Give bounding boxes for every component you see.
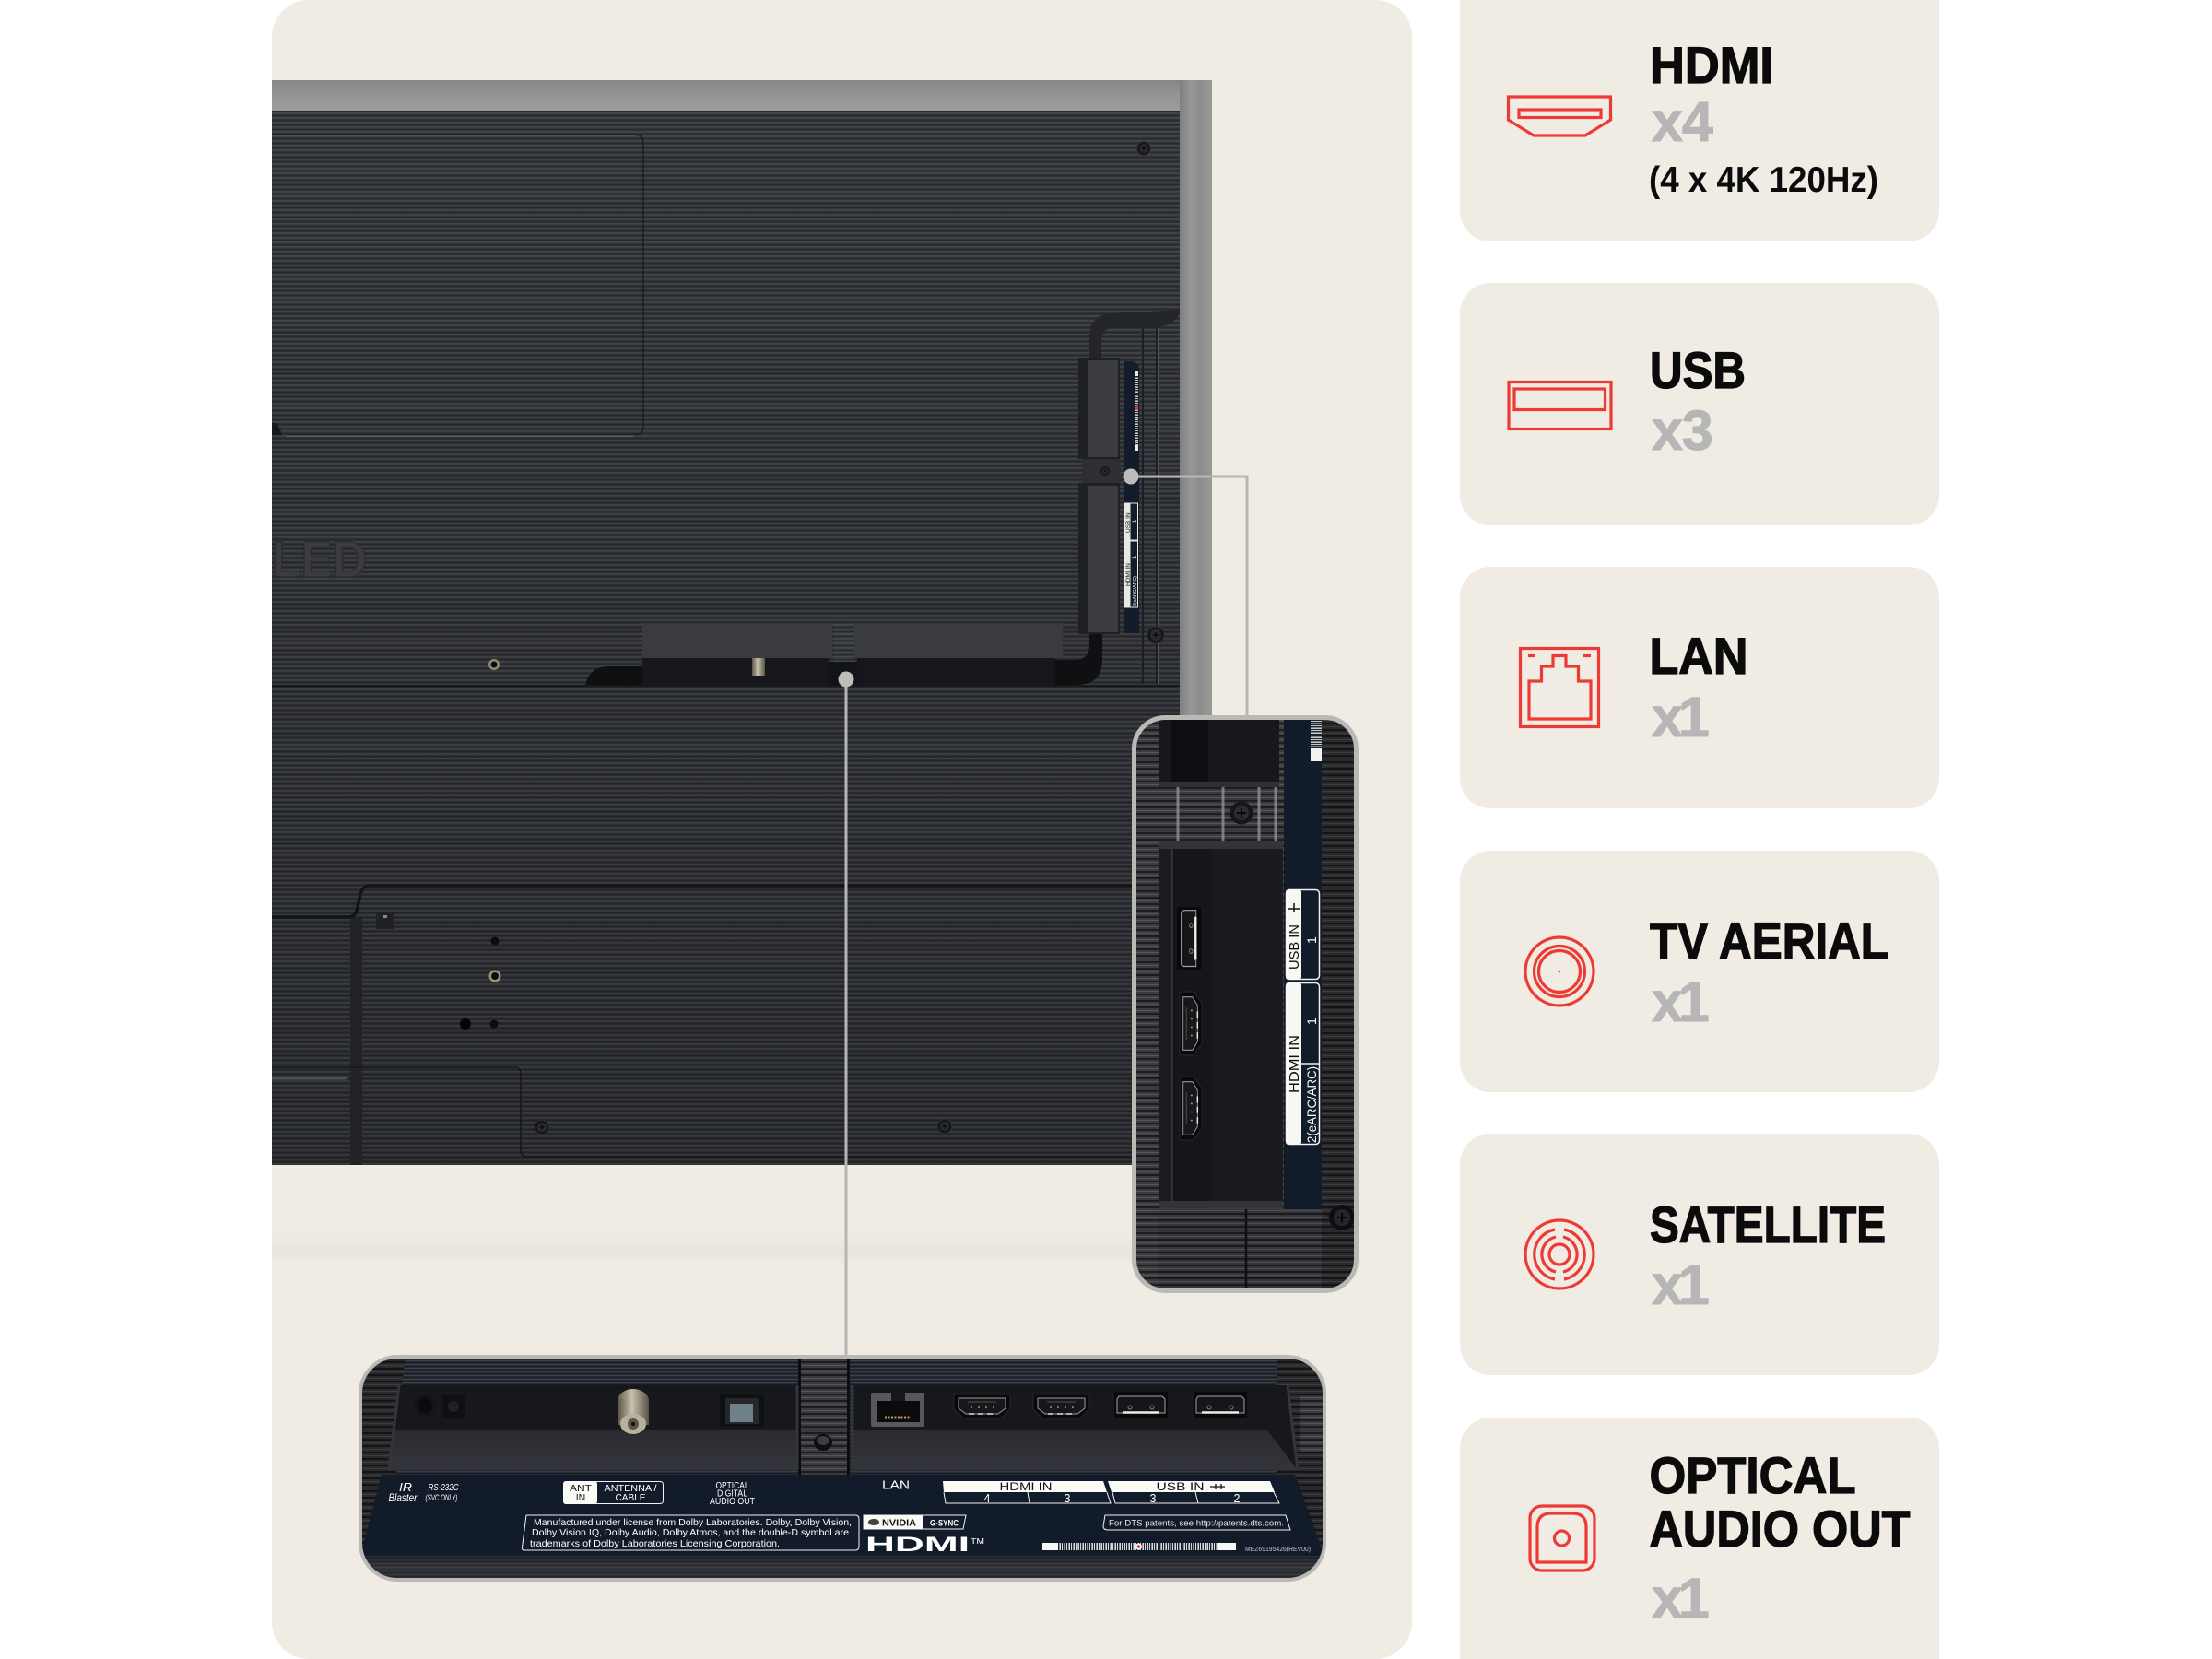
- left side block: [360, 1357, 406, 1475]
- label: RS-232C: [426, 1482, 459, 1503]
- label: LAN: LAN: [882, 1478, 910, 1491]
- port: RS-232C: [442, 1395, 465, 1418]
- label: model code: MEZ69195426(REV00): [1245, 1545, 1311, 1553]
- label: HDMI IN 4 3: 4: [984, 1492, 991, 1505]
- side label plate: USB IN: [1125, 512, 1132, 533]
- side port recess: [1159, 841, 1283, 1208]
- centre bracket left plate: [642, 623, 832, 685]
- port: HDMI 3: [1033, 1394, 1089, 1418]
- ribbed top background: [396, 1357, 1277, 1477]
- side label plate: 2(eARC/ARC): [1133, 576, 1138, 606]
- right channel highlight: [1158, 328, 1159, 684]
- lower side port cover: [1078, 483, 1120, 634]
- upper port bracket: [1159, 717, 1279, 787]
- label: NVIDIA G-SYNC badge: [864, 1515, 966, 1529]
- label: optical digital audio out: [710, 1481, 755, 1507]
- label: HDMI IN 4 3: 3: [1065, 1492, 1071, 1505]
- count: x1: x1: [1652, 971, 1709, 1033]
- heading: satellite: SATELLITE: [1650, 1195, 1886, 1253]
- TV frame top edge: [272, 80, 1212, 111]
- label: Dolby licence: Manufactured under license from Dolby Laboratories. Dolby, Dolby Vision,: [534, 1517, 852, 1528]
- port: HDMI 2: [1180, 1077, 1202, 1140]
- lower right cable swoosh: [1055, 634, 1102, 685]
- label: RS-232C: RS-232C: [428, 1482, 459, 1493]
- right port recess: [853, 1385, 1298, 1470]
- label: HDMI IN 1 and 2: 1: [1304, 1018, 1319, 1025]
- small clip: [376, 912, 394, 929]
- icon: optical socket: [1530, 1506, 1594, 1571]
- vertical recess strip: [350, 918, 362, 1165]
- label: USB IN 3 2: 2: [1234, 1492, 1241, 1505]
- label: optical digital audio out: AUDIO OUT: [710, 1497, 755, 1507]
- label: Dolby licence: trademarks of Dolby Laboratories Licensing Corporation.: [530, 1538, 780, 1549]
- label: USB IN 3 2: [1108, 1480, 1279, 1505]
- label: USB IN 3 2: USB IN: [1156, 1480, 1204, 1493]
- label: RS-232C: (SVC ONLY): [426, 1493, 457, 1503]
- label: USB IN 1: [1286, 889, 1320, 980]
- left stripe: [272, 1077, 347, 1080]
- ribbed rear cover: [272, 111, 1180, 1165]
- heading: LAN: LAN: [1650, 627, 1747, 685]
- label: IR Blaster: [389, 1480, 418, 1504]
- barcode: [1042, 1543, 1236, 1550]
- left cable swoosh: [585, 666, 642, 685]
- right dark ribs: [1322, 717, 1357, 1291]
- screw: right side: [1147, 626, 1165, 644]
- label: HDMI IN 4 3: [943, 1480, 1111, 1505]
- label: USB IN 1: USB IN: [1288, 924, 1302, 970]
- metal ribs highlights: [1178, 787, 1276, 841]
- inset border: [360, 1357, 1324, 1580]
- count: x1: x1: [1652, 1567, 1709, 1630]
- lower fold: [1245, 1209, 1247, 1291]
- barcode: [1311, 717, 1322, 761]
- right side highlight ribs: [1300, 1396, 1324, 1452]
- label: NVIDIA G-SYNC badge: NVIDIA: [882, 1519, 916, 1528]
- card: TV aerial: [1460, 851, 1939, 1092]
- port: USB 1: [1177, 907, 1201, 970]
- label: IR Blaster: Blaster: [389, 1493, 418, 1504]
- side bracket with screw: [1082, 459, 1121, 483]
- card: LAN: [1460, 567, 1939, 808]
- label: optical digital audio out: OPTICAL: [715, 1481, 749, 1491]
- label: NVIDIA G-SYNC badge: G-SYNC: [930, 1519, 959, 1528]
- label: DTS patents: [1103, 1515, 1290, 1530]
- floor shadow under TV: [272, 1235, 1134, 1266]
- lower compartment seam: [272, 1067, 1135, 1157]
- centre bracket middle: [830, 623, 857, 685]
- rear seam: [272, 685, 1180, 687]
- top right cable swoosh: [1089, 310, 1180, 358]
- port: USB 3: [1114, 1392, 1168, 1418]
- screw: bracket: [1230, 802, 1253, 824]
- heading: TV aerial: TV AERIAL: [1650, 912, 1888, 970]
- icon: LAN port: [1521, 649, 1598, 726]
- count: x1: x1: [1652, 686, 1709, 748]
- card: optical audio out: [1460, 1418, 1939, 1659]
- heading: optical audio out: OPTICAL: [1650, 1446, 1856, 1504]
- mounting holes: [460, 936, 501, 1030]
- count: x3: x3: [1652, 399, 1712, 462]
- side label plate: 1: [1133, 519, 1138, 523]
- label: ANT IN antenna / cable: [563, 1481, 664, 1504]
- count: x1: x1: [1652, 1253, 1709, 1316]
- upper access panel outline: [272, 135, 643, 435]
- screw: centre: [814, 1434, 832, 1451]
- port: HDMI 1: [1180, 992, 1202, 1055]
- port: optical: [720, 1394, 764, 1427]
- right side block: [1276, 1357, 1324, 1475]
- port: HDMI 4: [954, 1394, 1010, 1418]
- card: HDMI: [1460, 0, 1939, 241]
- connector line: side ports: [1123, 468, 1247, 717]
- label: IR Blaster: IR: [399, 1480, 412, 1494]
- label: Dolby licence: [522, 1515, 859, 1550]
- screw holes: upper ring: [488, 659, 500, 670]
- label: ANT IN antenna / cable: ANT: [570, 1483, 593, 1494]
- heading: HDMI: HDMI: [1650, 36, 1773, 94]
- connector line: bottom ports: [839, 671, 853, 1357]
- count: x4: x4: [1652, 90, 1713, 153]
- left port recess: [389, 1385, 797, 1470]
- label: DTS patents: For DTS patents, see http://patents.dts.com.: [1109, 1519, 1284, 1528]
- inset: bottom ports close-up: [360, 1357, 1324, 1580]
- side label plate: [1124, 361, 1139, 633]
- heading: optical audio out: AUDIO OUT: [1650, 1500, 1910, 1558]
- icon: USB port: [1509, 382, 1611, 429]
- dark ribbed base: [360, 1357, 1324, 1580]
- navy label plate: [1284, 717, 1322, 1209]
- label: HDMI IN 1 and 2: [1286, 982, 1320, 1145]
- label: HDMI IN 4 3: HDMI IN: [999, 1480, 1053, 1493]
- navy label plate: [360, 1475, 1324, 1556]
- card: satellite: [1460, 1134, 1939, 1375]
- centre bracket right plate: [854, 623, 1063, 685]
- screw: inset bottom: [1329, 1205, 1355, 1230]
- side label plate: HDMI IN: [1125, 563, 1132, 586]
- bottom ribs: [360, 1556, 1324, 1580]
- panel: TV rear view background: [272, 0, 1412, 1659]
- port: LAN: [871, 1393, 924, 1427]
- screw: lower middle: [936, 1119, 953, 1134]
- label: ANT IN antenna / cable: IN: [576, 1492, 585, 1503]
- inset border: [1134, 717, 1357, 1290]
- port: USB 2: [1194, 1392, 1247, 1418]
- heading: USB: USB: [1650, 341, 1746, 399]
- icon: HDMI port: [1508, 97, 1611, 135]
- right cable channel lines: [1143, 328, 1157, 684]
- cover shading: [272, 587, 1180, 1165]
- label: HDMI logo: [865, 1533, 984, 1556]
- label: optical digital audio out: DIGITAL: [717, 1489, 747, 1499]
- TV rear photo: [272, 80, 1212, 1165]
- panel highlight: [272, 135, 634, 436]
- screw: lower left: [535, 1119, 549, 1135]
- icon: satellite socket: [1525, 1220, 1594, 1288]
- icon: aerial socket: [1525, 937, 1594, 1006]
- label: ANT IN antenna / cable: CABLE: [616, 1492, 645, 1503]
- port: coax aerial: [618, 1389, 649, 1434]
- label: HDMI IN 1 and 2: 2(eARC/ARC): [1304, 1066, 1319, 1143]
- centre strip: [798, 1357, 850, 1475]
- notch at panel corner: [272, 423, 282, 435]
- screw: top right: [1136, 141, 1151, 156]
- note: 4 x 4K 120Hz: (4 x 4K 120Hz): [1649, 160, 1878, 200]
- heading: optical audio out: [1650, 1446, 1910, 1558]
- upper side port cover: [1078, 358, 1120, 459]
- lower ribs shade: [1159, 1209, 1322, 1291]
- inset: side ports close-up: [1134, 717, 1357, 1291]
- label: USB IN 3 2: 3: [1150, 1492, 1157, 1505]
- bottom rib lines: [360, 1556, 1324, 1580]
- label: USB IN 1: 1: [1304, 936, 1319, 944]
- label: Dolby licence: Dolby Vision IQ, Dolby Audio, Dolby Atmos, and the double-D symbol are: [532, 1527, 849, 1538]
- card: USB: [1460, 283, 1939, 525]
- lower panel seam: [272, 886, 1135, 917]
- ribbed background: [1136, 720, 1322, 1288]
- embossed logo: LED: [272, 530, 367, 588]
- label: ANT IN antenna / cable: ANTENNA /: [605, 1483, 657, 1494]
- TV frame right edge: [1180, 80, 1212, 725]
- port: IR jack: [414, 1394, 436, 1417]
- label: HDMI logo: HDMI: [865, 1533, 970, 1556]
- label: HDMI IN 1 and 2: HDMI IN: [1288, 1035, 1302, 1093]
- label: HDMI logo: TM: [971, 1537, 984, 1546]
- side label plate: 1: [1133, 555, 1138, 559]
